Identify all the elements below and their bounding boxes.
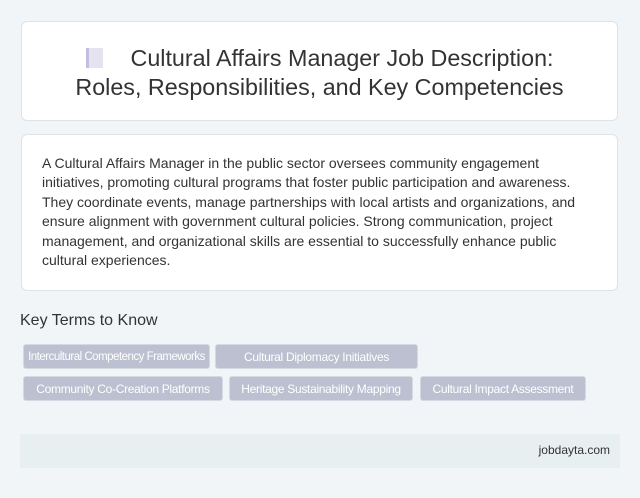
description text: A Cultural Affairs Manager in the public sector oversees community engagement initiatives, promoting cultural programs that foster public participation and awareness. They coordinate events, manage partnerships with local artists and organizations, and ensure alignment with government cultural policies. Strong communication, project management, and organizational skills are essential to successfully enhance public cultural experiences. bbox=[42, 155, 575, 268]
title bbox=[75, 45, 564, 100]
tag: Community Co-Creation Platforms bbox=[36, 382, 210, 396]
footer bbox=[20, 434, 620, 468]
icon: document bbox=[86, 48, 102, 68]
tag: Heritage Sustainability Mapping bbox=[241, 382, 401, 396]
tag bbox=[23, 344, 210, 369]
title: Roles, Responsibilities, and Key Competencies bbox=[75, 74, 564, 100]
tag: Intercultural Competency Frameworks bbox=[28, 351, 205, 363]
heading: key terms: Key Terms to Know bbox=[20, 312, 158, 329]
title: Cultural Affairs Manager Job Description: bbox=[130, 45, 554, 71]
tag bbox=[23, 376, 223, 401]
tag: Cultural Impact Assessment bbox=[433, 382, 573, 396]
title card bbox=[21, 21, 618, 121]
tag: Cultural Diplomacy Initiatives bbox=[244, 350, 389, 364]
tag bbox=[215, 344, 418, 369]
tag bbox=[420, 376, 586, 401]
tag bbox=[229, 376, 413, 401]
description card bbox=[21, 134, 618, 291]
footer text: jobdayta.com bbox=[539, 443, 610, 457]
